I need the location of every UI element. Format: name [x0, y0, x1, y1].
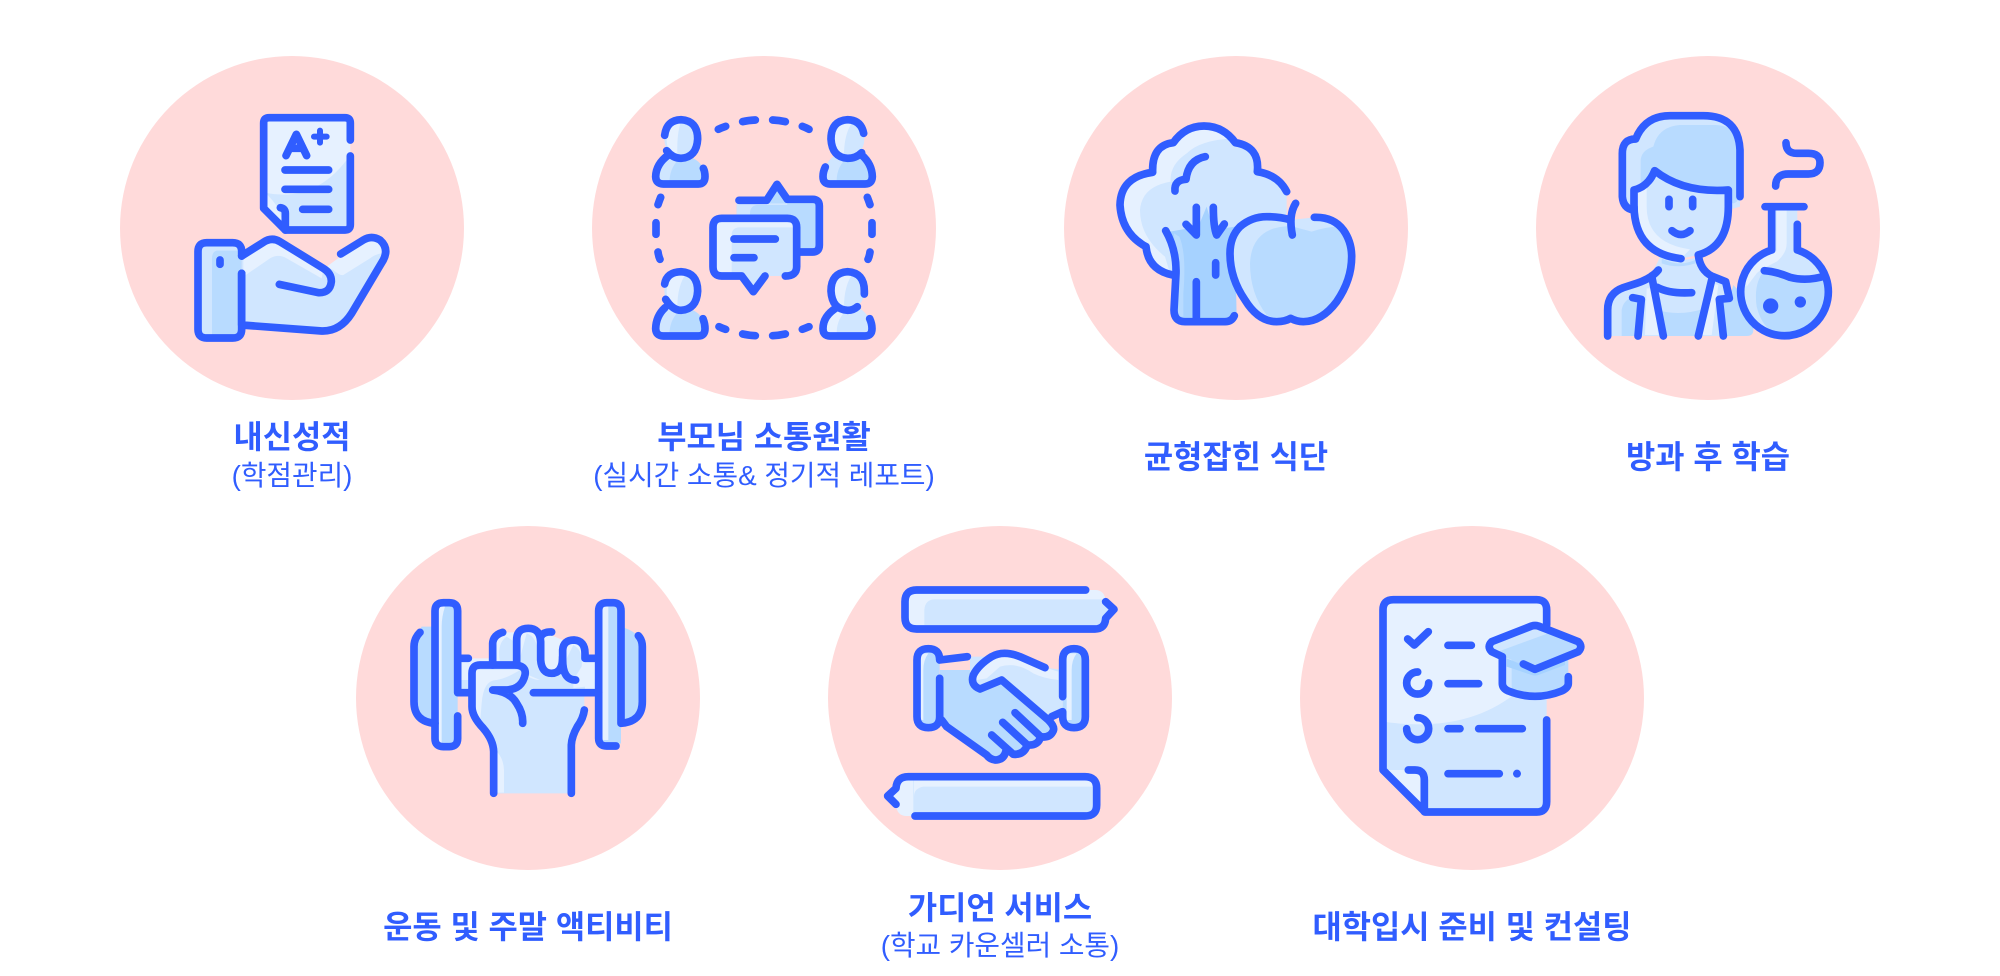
panel: exercise and weekend activities [356, 526, 700, 945]
circle background [592, 56, 936, 400]
circle background [828, 526, 1172, 870]
panel: balanced diet [1064, 56, 1408, 475]
circle background [356, 526, 700, 870]
title: 운동 및 주말 액티비티 [383, 909, 673, 945]
title: 부모님 소통원활 [657, 419, 871, 455]
icon: hand holding A+ paper [198, 118, 386, 338]
circle background [120, 56, 464, 400]
subtitle: (학점관리) [232, 460, 352, 491]
panel: after-school study [1536, 56, 1880, 475]
icon: four people with chat bubbles [656, 120, 872, 336]
icon: fist holding dumbbell [414, 603, 642, 793]
circle background [1536, 56, 1880, 400]
title: 균형잡힌 식단 [1144, 439, 1328, 475]
icon: handshake between two bars [888, 590, 1114, 816]
title: 가디언 서비스 [908, 890, 1092, 926]
icon: checklist with graduation cap [1383, 600, 1581, 812]
circle background [1064, 56, 1408, 400]
panel: parent communication [592, 56, 936, 491]
title: 내신성적 [233, 419, 351, 455]
subtitle: (학교 카운셀러 소통) [881, 930, 1119, 961]
circle background [1300, 526, 1644, 870]
icon: student with flask [1608, 116, 1828, 336]
subtitle: (실시간 소통& 정기적 레포트) [593, 460, 935, 491]
title: 방과 후 학습 [1626, 439, 1790, 475]
panel: school grades [120, 56, 464, 491]
panel: college admission [1300, 526, 1644, 945]
icon: broccoli and apple [1120, 126, 1352, 322]
title: 대학입시 준비 및 컨설팅 [1312, 909, 1632, 945]
panel: guardian service [828, 526, 1172, 961]
